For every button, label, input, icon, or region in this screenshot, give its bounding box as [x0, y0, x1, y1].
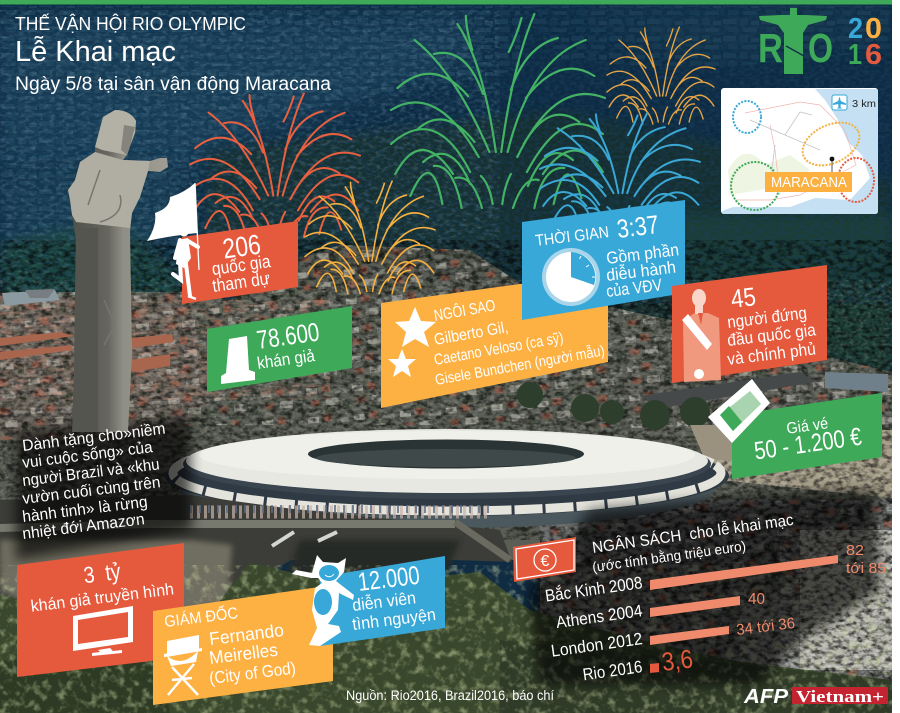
label: ticket price: Giá vé [785, 415, 829, 438]
buildings [2, 290, 60, 306]
statue: Christ the Redeemer [68, 110, 168, 432]
text block: dedication: người Brazil và «khu [21, 456, 160, 490]
icon: small star [388, 349, 416, 377]
panel: 206 countries [147, 183, 298, 304]
label: spectators: khán giả [256, 346, 316, 373]
row: Rio 2016: 3,6 [660, 643, 695, 677]
logo: Rio 2016: 0 [865, 13, 882, 45]
logo: Rio 2016: 2 [848, 13, 863, 45]
label: heads of state: người đứng [726, 303, 808, 332]
icon: clock [542, 248, 600, 306]
label: TV viewers: khán giả truyền hình [30, 580, 175, 616]
row: London 2012: 34 tới 36 [735, 615, 796, 639]
names: stars list: Gilberto Gil, [433, 319, 510, 349]
text block: dedication: hành tinh» là rừng [21, 494, 149, 526]
panel: duration: diễu hành [605, 258, 677, 285]
icon: flag bearer [147, 183, 199, 299]
label: volunteers: diễn viên [351, 588, 417, 615]
logo: Vietnam+: Vietnam+ [796, 687, 884, 706]
panel: director: (City of God) [208, 659, 297, 688]
text block: dedication: Dành tặng cho»niềm [21, 421, 166, 455]
logo: Rio 2016 [758, 8, 882, 74]
row: Beijing 2008: 82 [846, 542, 864, 559]
stat: 206: 206 [221, 229, 263, 265]
panel: stars: Caetano Veloso (ca sỹ) [433, 329, 565, 369]
icon: airplane [832, 95, 847, 110]
stat: 12.000: 12.000 [356, 560, 421, 597]
stat: price range: 50 - 1.200 € [752, 423, 863, 465]
icon: large star [395, 307, 436, 347]
icon: television [73, 606, 133, 656]
page margin: white strip [892, 0, 900, 713]
jungle foreground [0, 562, 892, 713]
stadium: Maracana [165, 429, 729, 528]
panel: director [153, 585, 333, 705]
title block [15, 13, 331, 95]
subheading: unit: (ước tính bằng triệu euro) [591, 538, 747, 575]
shade: behind left text [16, 418, 192, 560]
icon: ticket [708, 379, 770, 443]
firework: orange [607, 27, 715, 124]
text block: dedication: nhiệt đới Amazơn [21, 511, 146, 543]
row: Athens 2004 [555, 591, 765, 632]
heading: director: GIÁM ĐỐC [163, 602, 239, 631]
top green bar [0, 0, 892, 4]
stat: 78.600: 78.600 [255, 316, 321, 355]
heading: event name: THẾ VẬN HỘI RIO OLYMPIC [15, 13, 246, 34]
panel: 45 heads of state: đầu quốc gia [726, 320, 817, 350]
panel: 78,600 spectators [207, 306, 352, 392]
row: Rio 2016 [581, 643, 695, 684]
heading: budget: NGÂN SÁCH cho lễ khai mạc [591, 510, 795, 557]
logo: Rio 2016: R [758, 25, 783, 71]
row: London 2012: London 2012 [550, 629, 644, 661]
subtitle: Ngày 5/8 tại sân vận động Maracana [15, 74, 331, 95]
row: Athens 2004: Athens 2004 [555, 601, 644, 632]
text: parade note: Gồm phần [605, 240, 680, 268]
panel: 45 heads of state [672, 265, 827, 383]
heading: time: THỜI GIAN [534, 222, 610, 250]
panel: volunteers [292, 555, 445, 646]
icon: spectator seat [221, 336, 255, 384]
zone: blue dotted ring [733, 101, 761, 133]
heading: stars: NGÔI SAO [432, 295, 497, 325]
zone: orange dotted ring [796, 114, 866, 174]
background: right-side city buildings [540, 500, 892, 690]
label: attending: tham dự [211, 268, 271, 296]
firework: red [190, 93, 360, 237]
shade: behind budget chart [528, 490, 880, 685]
zone: green dotted ring [731, 162, 779, 210]
zone: red dotted ring [838, 158, 874, 202]
logo: AFP: AFP [743, 686, 789, 708]
icon: head of state with sash [682, 289, 721, 382]
panel: 45 heads of state: và chính phủ [726, 339, 817, 369]
logo: Rio 2016: 6 [865, 39, 882, 71]
name: Fernando Meirelles: Fernando [208, 620, 285, 649]
panel: duration: của VĐV [605, 275, 664, 301]
logo: Rio 2016: O [808, 25, 833, 71]
scale: 3 km: 3 km [852, 98, 876, 110]
firework: yellow [305, 181, 435, 294]
map: Rio city venues [721, 88, 878, 214]
logo: Rio 2016: 1 [848, 39, 862, 71]
text block: dedication: vui cuộc sống» của [21, 439, 154, 472]
row: Athens 2004: 40 [748, 591, 765, 608]
panel: stars: Gisele Bundchen (người mẫu) [434, 342, 606, 389]
stat: 45: 45 [729, 281, 758, 314]
panel: volunteers: tình nguyện [351, 605, 437, 634]
row: Beijing 2008: tới 85 [846, 560, 886, 577]
label: countries: quốc gia [211, 251, 273, 279]
row: Rio 2016: Rio 2016 [581, 657, 644, 684]
marker: Maracana [765, 157, 852, 192]
icon: mascot [292, 555, 354, 646]
row: Beijing 2008: Bắc Kinh 2008 [544, 573, 644, 606]
text block: dedication [21, 421, 166, 543]
city [0, 245, 892, 560]
firework: green [391, 14, 605, 208]
source note: Nguồn: Rio2016, Brazil2016, báo chí [346, 688, 554, 703]
row: London 2012 [550, 615, 796, 661]
panel: ticket price [708, 379, 882, 479]
stat: 3 billion: 3 tỷ [82, 558, 122, 588]
icon: euro banknote: € [541, 553, 550, 570]
stat: 3:37: 3:37 [615, 209, 660, 244]
heading: main title: Lễ Khai mạc [15, 35, 176, 68]
row: Beijing 2008 [544, 542, 886, 606]
icon: euro banknote [513, 537, 576, 582]
firework: blue [540, 113, 700, 226]
panel: stars [381, 272, 608, 408]
icon: director chair [164, 635, 202, 695]
panel: duration [522, 200, 685, 320]
observation deck and cliff [0, 495, 512, 640]
budget chart [513, 510, 886, 684]
text block: dedication: vườn cuối cùng trên [21, 474, 161, 508]
panel: TV audience [17, 543, 184, 677]
panel: director: Meirelles [208, 640, 279, 668]
marker: Maracana: MARACANA [771, 175, 847, 191]
